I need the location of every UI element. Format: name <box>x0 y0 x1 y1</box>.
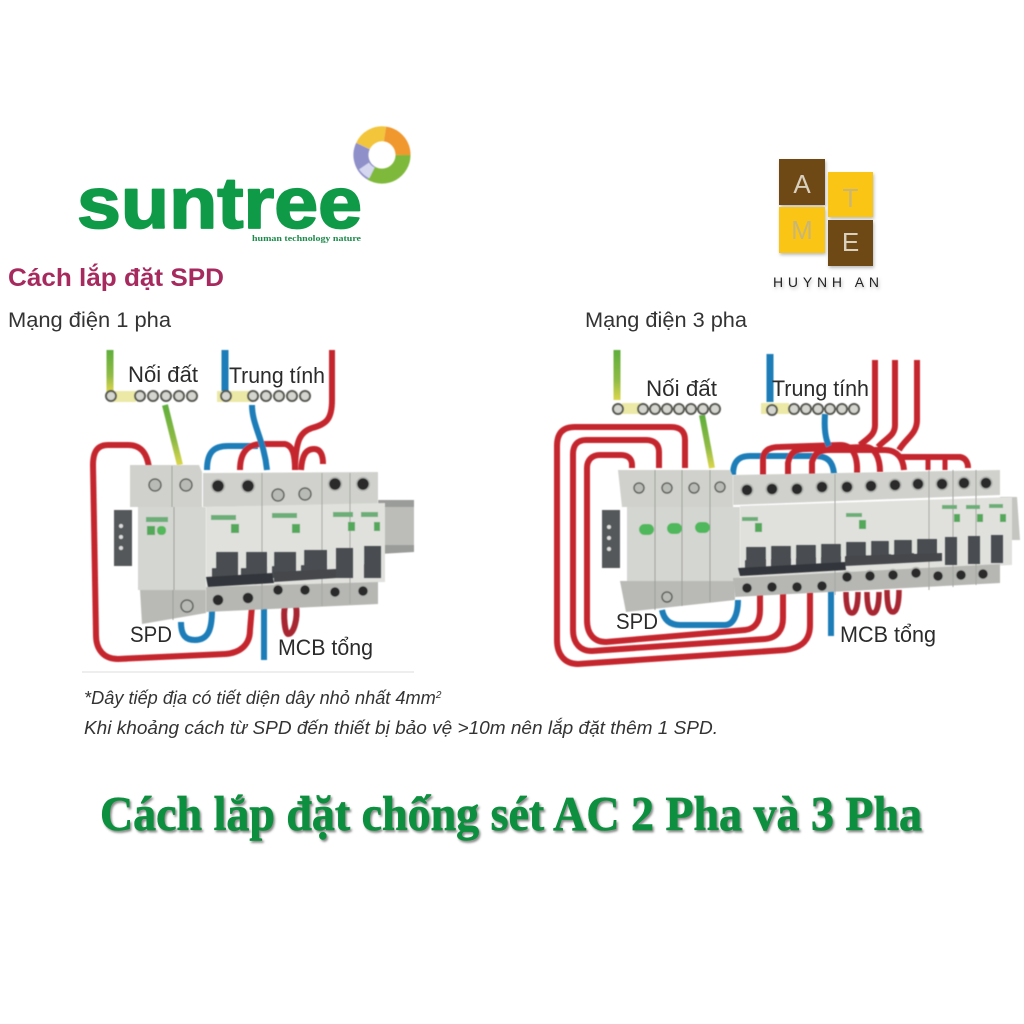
label: SPD: SPD <box>130 622 172 647</box>
label: neutral: Trung tính <box>229 363 325 388</box>
label: earth: Nối đất <box>128 362 198 387</box>
logo tagline: human technology nature <box>252 233 361 243</box>
earth busbar <box>613 403 720 414</box>
wires behind the device <box>93 350 332 660</box>
din rail and bracket <box>602 497 1020 568</box>
MCB toggle handles <box>738 535 1003 576</box>
label: SPD: SPD <box>616 609 658 634</box>
footnote <box>84 688 718 738</box>
looped phase wires <box>557 350 968 664</box>
SPD module <box>130 465 206 624</box>
footnote line 1: 2 <box>435 690 442 701</box>
din rail and bracket <box>114 500 414 566</box>
label: neutral: Trung tính <box>772 376 869 401</box>
neutral busbar <box>217 391 310 402</box>
diagram: 1 phase <box>82 350 414 673</box>
earth busbar <box>106 391 197 402</box>
main title: Cách lắp đặt chống sét AC 2 Pha và 3 Pha <box>100 786 922 841</box>
label: main breaker: MCB tổng <box>840 622 936 647</box>
baseline rule <box>82 671 414 673</box>
MCB module <box>733 470 1012 597</box>
diagram: 3 phase <box>557 350 1020 664</box>
subheading: 3 phase: Mạng điện 3 pha <box>585 308 747 332</box>
MCB module <box>203 472 385 612</box>
brand name: HUYNH AN <box>773 274 879 290</box>
footnote line 1: *Dây tiếp địa có tiết diện dây nhỏ nhất 4mm <box>84 688 436 708</box>
logo: ATME Huynh An <box>773 159 879 290</box>
SPD module <box>618 470 740 612</box>
logo wordmark: suntree <box>77 164 362 244</box>
tile E: E <box>842 227 859 257</box>
label: earth: Nối đất <box>646 376 717 401</box>
label: main breaker: MCB tổng <box>278 635 373 660</box>
tile M: M <box>791 215 813 245</box>
footnote line 2: Khi khoảng cách từ SPD đến thiết bị bảo vệ >10m nên lắp đặt thêm 1 SPD. <box>84 718 718 738</box>
MCB toggle handles <box>206 546 381 587</box>
tile A: A <box>793 169 811 199</box>
section heading: Cách lắp đặt SPD <box>8 262 224 292</box>
neutral busbar <box>761 403 859 415</box>
logo: suntree <box>77 134 403 244</box>
subheading: 1 phase: Mạng điện 1 pha <box>8 308 171 332</box>
logo ring <box>361 134 403 176</box>
tile T: T <box>843 183 859 213</box>
